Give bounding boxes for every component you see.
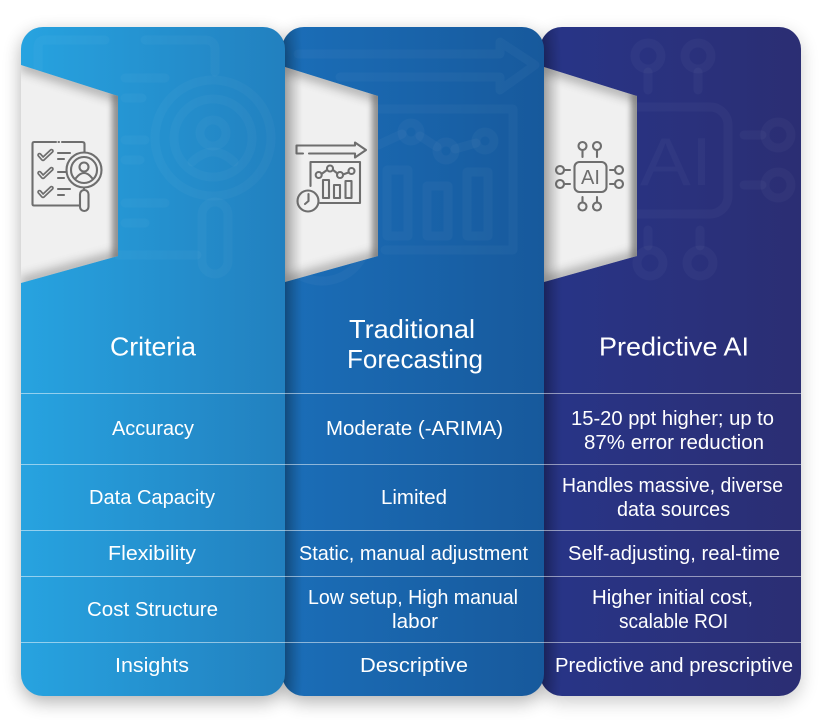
row: accuracy: Accuracy	[112, 418, 194, 440]
heading: criteria: Criteria	[110, 332, 197, 362]
row: data capacity: data sources	[617, 499, 730, 521]
notch: criteria icon holder	[21, 65, 124, 283]
row: insights: Descriptive	[360, 655, 468, 677]
notch: forecasting icon holder	[285, 67, 384, 282]
row: data capacity: Handles massive, diverse	[562, 475, 783, 497]
column headings	[110, 314, 749, 374]
row: insights	[115, 655, 793, 677]
row: flexibility: Static, manual adjustment	[299, 543, 528, 565]
row: data capacity: Data Capacity	[89, 487, 215, 509]
row: accuracy: 15-20 ppt higher; up to	[571, 408, 774, 430]
divider lines	[21, 394, 801, 642]
row: accuracy: Moderate (-ARIMA)	[326, 418, 503, 440]
icon: faint AI chip watermark: AI	[640, 124, 712, 200]
icon: faint magnifier watermark	[188, 76, 238, 260]
icon: forecasting chart	[296, 142, 366, 212]
row: cost structure: scalable ROI	[619, 611, 728, 633]
heading: predictive AI: Predictive AI	[599, 332, 749, 362]
row: flexibility: Flexibility	[108, 543, 196, 565]
row: cost structure: Low setup, High manual	[308, 587, 518, 609]
row: cost structure: Cost Structure	[87, 599, 218, 621]
panel: predictive AI	[540, 27, 801, 702]
icon: faint forecasting chart watermark	[398, 130, 480, 154]
row: cost structure	[87, 587, 753, 633]
heading: traditional forecasting: Forecasting	[347, 344, 483, 374]
panel: criteria	[21, 27, 285, 702]
panel: traditional forecasting	[276, 27, 544, 702]
row: data capacity: Limited	[381, 487, 447, 509]
row: insights: Insights	[115, 655, 189, 677]
heading: traditional forecasting: Traditional	[349, 314, 475, 344]
row: data capacity	[89, 475, 783, 521]
icon: AI chip	[556, 142, 623, 210]
icon: checklist with magnifier	[32, 142, 102, 211]
row: cost structure: Higher initial cost,	[592, 587, 753, 609]
notch: predictive AI icon holder	[544, 67, 643, 282]
row: flexibility	[108, 543, 780, 565]
heading: traditional forecasting	[347, 314, 483, 374]
row: cost structure: labor	[392, 611, 438, 633]
row: accuracy	[112, 408, 774, 454]
icon: faint AI chip watermark	[644, 68, 766, 250]
row: insights: Predictive and prescriptive	[555, 655, 793, 677]
row: flexibility: Self-adjusting, real-time	[568, 543, 780, 565]
row: accuracy: 87% error reduction	[584, 432, 764, 454]
icon: AI chip: AI	[581, 167, 600, 189]
